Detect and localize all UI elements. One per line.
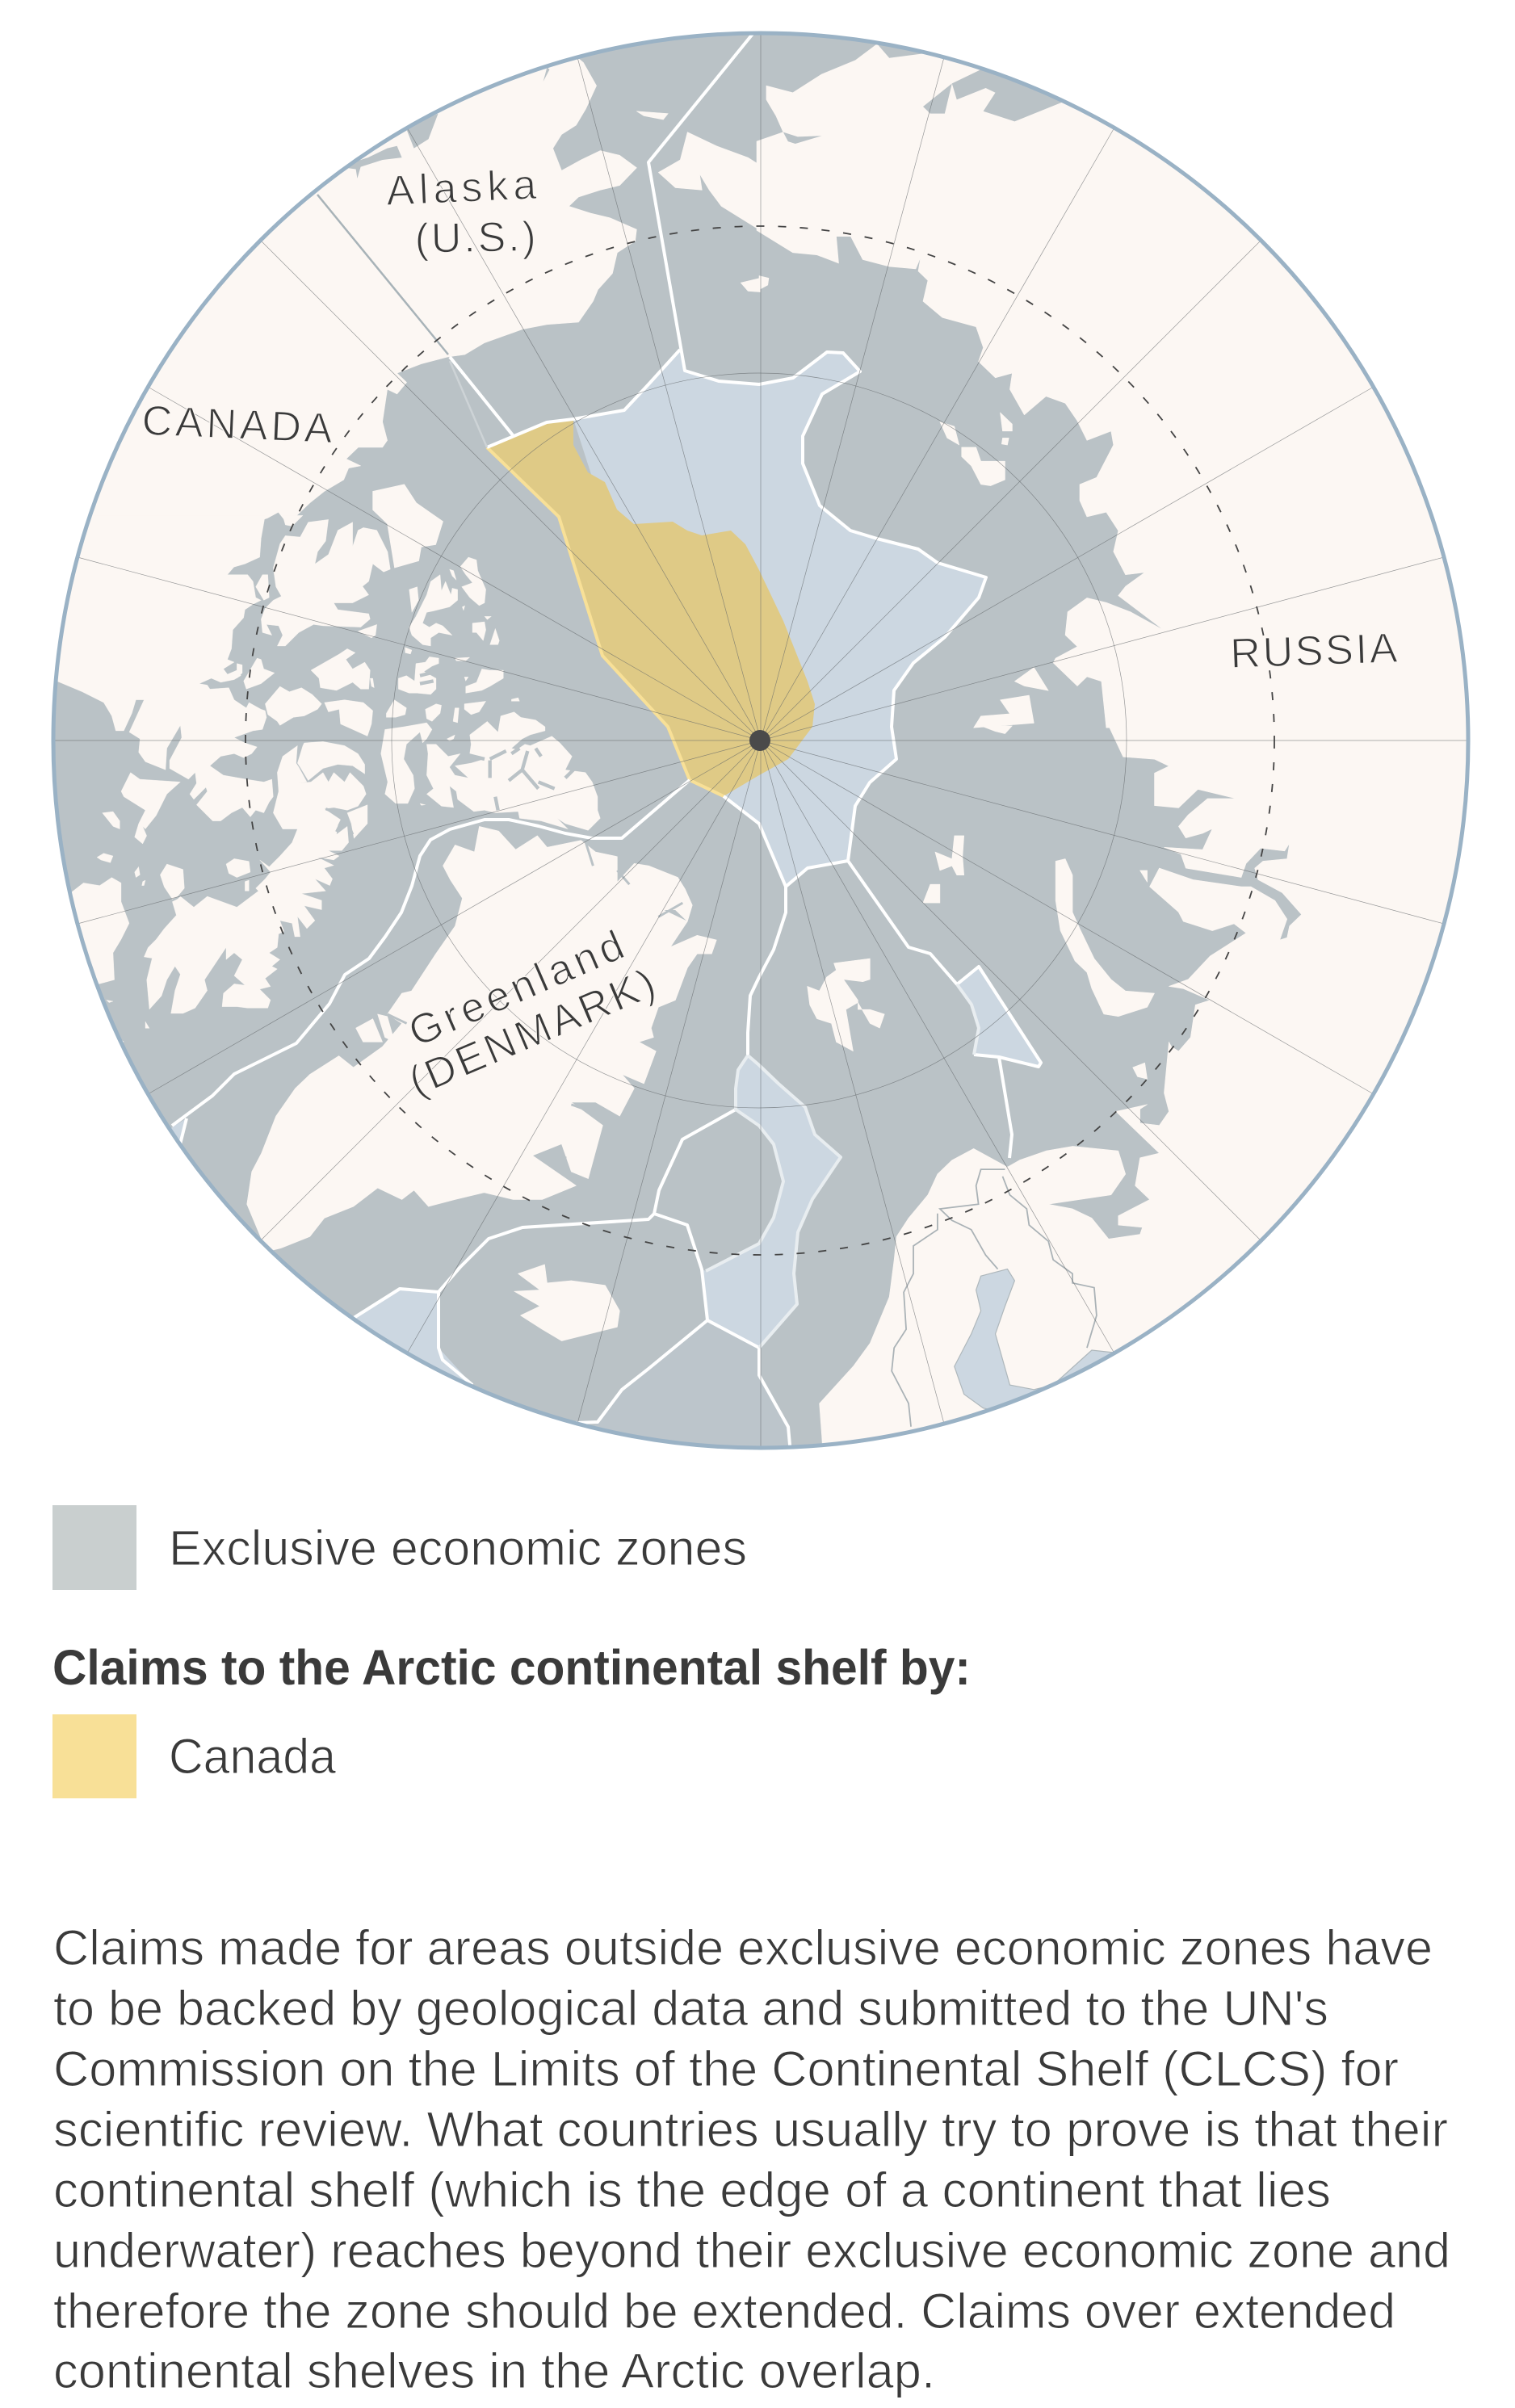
extended claims zone: Norwegian Sea	[702, 1055, 841, 1348]
label: Alaska: Alaska	[385, 162, 537, 215]
zone: Faroe Islands area	[565, 1320, 791, 1462]
Arctic Circle dashed line	[246, 226, 1274, 1255]
explanatory paragraph	[53, 1920, 1450, 2398]
semi-transparent boundary lines	[706, 984, 979, 1348]
label: Greenland: Greenland	[402, 922, 631, 1056]
legend label: Canada: Canada	[169, 1729, 336, 1784]
label: Denmark: (DENMARK)	[402, 960, 662, 1105]
explanatory paragraph: therefore the zone should be extended. Claims over extended	[53, 2284, 1395, 2339]
graticule circle at 80 degrees	[392, 373, 1127, 1108]
legend heading: Claims to the Arctic continental shelf by:	[52, 1640, 971, 1695]
extended claims zone: Barents Sea	[957, 967, 1041, 1067]
maritime boundary lines	[172, 34, 1041, 1454]
legend label: exclusive economic zones: Exclusive economic zones	[169, 1521, 747, 1575]
explanatory paragraph: continental shelves in the Arctic overlap.	[53, 2343, 935, 2398]
panel: polar map of the Arctic	[52, 31, 1470, 1450]
Gulf of Bothnia	[955, 1269, 1116, 1422]
Canada claim pale edge	[487, 447, 724, 796]
legend swatch: Canada	[52, 1714, 136, 1798]
ocean background	[55, 36, 1302, 1445]
label: U.S.: (U.S.)	[414, 213, 536, 262]
explanatory paragraph: underwater) reaches beyond their exclusive economic zone and	[53, 2223, 1450, 2278]
label: Canada: CANADA	[141, 397, 334, 452]
country borders in Scandinavia	[892, 1169, 1097, 1427]
explanatory paragraph: Claims made for areas outside exclusive economic zones have	[53, 1920, 1433, 1975]
fjord strokes in the Canadian Arctic and Greenland	[325, 672, 682, 1158]
North Pole marker	[749, 730, 770, 751]
US-Canada land border	[317, 195, 448, 354]
explanatory paragraph: continental shelf (which is the edge of a continent that lies	[53, 2163, 1331, 2217]
inlets cutting into land	[339, 27, 1063, 178]
Canada claim	[487, 419, 815, 796]
explanatory paragraph: scientific review. What countries usually try to prove is that their	[53, 2102, 1448, 2157]
graticule meridians	[53, 33, 1468, 1448]
label: Russia: RUSSIA	[1229, 625, 1399, 678]
extended claims zone: central Arctic	[573, 350, 986, 887]
legend	[52, 1505, 971, 1798]
explanatory paragraph: to be backed by geological data and submitted to the UN's	[53, 1981, 1328, 2036]
land masses	[52, 31, 1470, 1450]
map outer ring	[53, 33, 1468, 1448]
US-Canada maritime border faint	[450, 361, 487, 447]
extended claims zone: Labrador Sea	[357, 1290, 465, 1381]
legend swatch: exclusive economic zones	[52, 1505, 136, 1590]
explanatory paragraph: Commission on the Limits of the Continental Shelf (CLCS) for	[53, 2041, 1399, 2096]
extended claims zone: Davis Strait sliver	[171, 1119, 184, 1140]
